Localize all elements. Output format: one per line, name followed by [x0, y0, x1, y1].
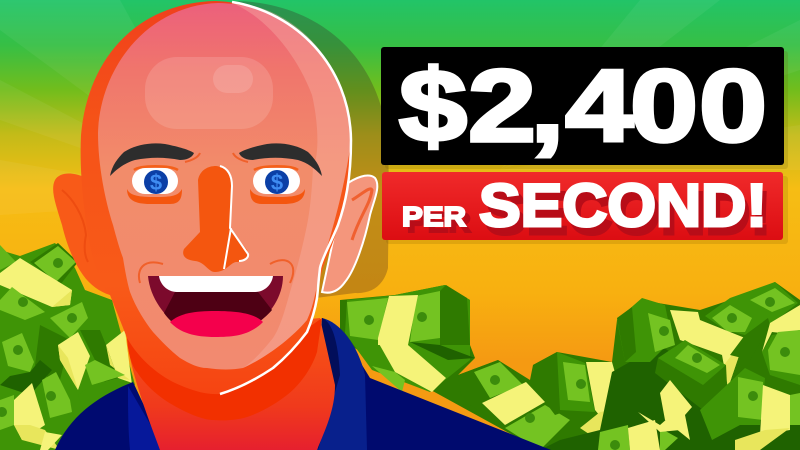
- jacket: [55, 318, 551, 450]
- brow creases: [185, 153, 248, 162]
- right eyebrow: [239, 143, 322, 176]
- right ear: [322, 176, 377, 293]
- subheadline box: PER SECOND!: PER: [407, 207, 471, 238]
- nose: [183, 166, 248, 272]
- face highlight side: [232, 3, 351, 368]
- right eye: $: [271, 170, 283, 195]
- background sunburst rays: [0, 0, 800, 215]
- head base: [81, 1, 352, 394]
- money pile: backing: [340, 282, 800, 450]
- face: [98, 3, 351, 370]
- money pile: left: [0, 243, 135, 450]
- right eye: [250, 166, 305, 204]
- subheadline box: PER SECOND!: PER: [402, 201, 466, 232]
- head shadow: [235, 1, 389, 300]
- headline box: $2,400: $2,400: [399, 49, 767, 163]
- left ear: [53, 174, 140, 295]
- left ear crease: [62, 190, 88, 262]
- forehead glint: [213, 65, 253, 93]
- subheadline box: PER SECOND!: SECOND!: [485, 180, 771, 247]
- subheadline box: PER SECOND!: [382, 172, 788, 247]
- left eyebrow: [110, 143, 194, 176]
- subheadline box: PER SECOND!: SECOND!: [479, 172, 767, 239]
- smile creases: [139, 260, 293, 283]
- head white outline: [220, 2, 351, 394]
- mouth: [148, 276, 283, 337]
- money pile: centre: [345, 285, 650, 450]
- left eye: [127, 166, 182, 204]
- forehead highlight: [145, 57, 273, 129]
- left eye: $: [150, 170, 162, 195]
- money pile: right: [540, 282, 800, 450]
- neck: [127, 318, 335, 450]
- chin shadow: [127, 318, 322, 420]
